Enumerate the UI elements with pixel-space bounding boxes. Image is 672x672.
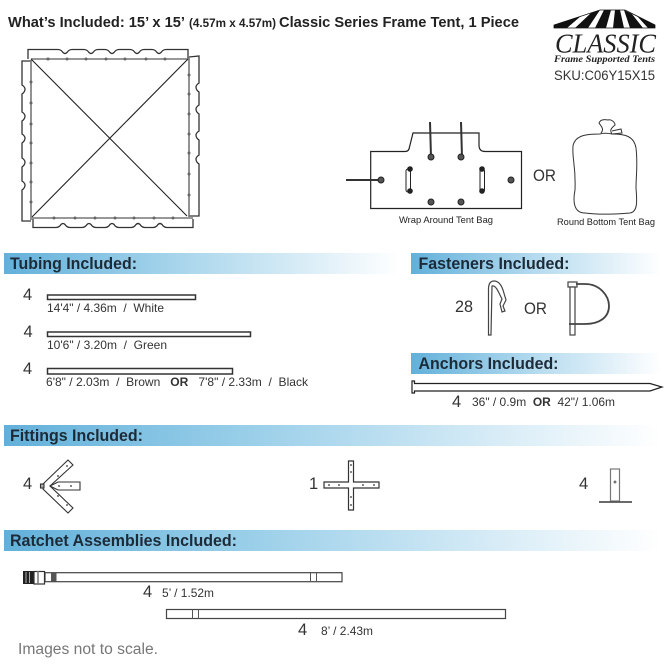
heading: ratchet assemblies [4, 530, 661, 551]
anchor text [452, 393, 615, 411]
ratchet strap 5 ft [23, 571, 342, 584]
OR between bags: OR [533, 167, 556, 185]
tube 2 [24, 323, 250, 352]
heading: fittings: Fittings Included: [10, 426, 143, 445]
panel: ratchet assemblies [4, 530, 661, 639]
tent perimeter [31, 57, 193, 220]
logo tagline: Frame Supported Tents [553, 55, 655, 65]
ratchet 8 ft label [298, 621, 373, 639]
label: round bottom tent bag: Round Bottom Tent Bag [557, 217, 655, 228]
count: base plate: 4 [579, 475, 588, 493]
tube 3: 6'8" / 2.03m / Brown OR 7'8" / 2.33m / Black [46, 375, 309, 389]
OR between fasteners: OR [524, 300, 547, 318]
title: (4.57m x 4.57m) [189, 18, 276, 30]
tube 1 [23, 286, 196, 315]
anchor text: 36" / 0.9m OR 42"/ 1.06m [472, 395, 615, 409]
ratchet 5 ft label: 5’ / 1.52m [162, 586, 214, 600]
ratchet strap 8 ft [166, 609, 506, 619]
bag handles [406, 169, 484, 192]
grommets [30, 58, 190, 220]
label: wrap around tent bag: Wrap Around Tent Bag [399, 215, 493, 226]
icon: round bottom tent bag [573, 120, 637, 214]
count: 3-way fitting: 4 [23, 475, 32, 493]
heading: fasteners [411, 253, 661, 274]
logo: Classic frame supported tents [553, 10, 657, 83]
tube 2: 10'6" / 3.20m / Green [47, 338, 167, 352]
title [8, 14, 519, 31]
icon: wrap around tent bag [346, 122, 522, 208]
tube 3: 4 [23, 360, 32, 378]
bag stakes [346, 122, 462, 180]
logo wordmark: CLASSIC [555, 28, 657, 58]
count: cross fitting: 1 [309, 475, 318, 493]
SKU: SKU:C06Y15X15 [554, 68, 655, 83]
panel: tubing [4, 253, 400, 389]
tube 1: 4 [23, 286, 32, 304]
panel: fasteners [411, 253, 661, 335]
icon: ratchet buckle [23, 571, 44, 584]
tent cross cables [31, 59, 188, 217]
icon: anchor stake [412, 381, 662, 393]
ratchet 8 ft label: 8’ / 2.43m [321, 624, 373, 638]
title: What’s Included: 15’ x 15’ [8, 14, 185, 31]
tube 2: 4 [24, 323, 33, 341]
panel: fittings [4, 425, 661, 513]
heading: tubing: Tubing Included: [10, 254, 137, 273]
icon: base plate [599, 469, 632, 502]
icon: cross fitting [324, 461, 379, 510]
tube 3 [23, 360, 309, 389]
heading: tubing [4, 253, 400, 274]
ratchet 8 ft label: 4 [298, 621, 307, 639]
icon: lynch pin [568, 282, 609, 335]
heading: anchors [411, 353, 661, 374]
ratchet 5 ft label: 4 [143, 583, 152, 601]
icon: hairpin fastener [488, 281, 506, 335]
title: Classic Series Frame Tent, 1 Piece [279, 14, 519, 31]
heading: ratchet assemblies: Ratchet Assemblies Included: [10, 531, 237, 550]
count: fasteners: 28 [455, 298, 473, 316]
anchor text: 4 [452, 393, 461, 411]
heading: fasteners: Fasteners Included: [418, 254, 570, 273]
tent flaps [22, 50, 199, 228]
note: images not to scale: Images not to scale. [18, 641, 158, 658]
bag grommets [378, 154, 514, 205]
icon: striped tent roof [554, 10, 655, 28]
tent top diagram [22, 50, 199, 228]
heading: fittings [4, 425, 661, 446]
ratchet 5 ft label [143, 583, 214, 601]
heading: anchors: Anchors Included: [418, 354, 558, 373]
icon: 3-way fitting [40, 460, 80, 513]
panel: anchors [411, 353, 662, 411]
tube 1: 14'4" / 4.36m / White [47, 301, 164, 315]
